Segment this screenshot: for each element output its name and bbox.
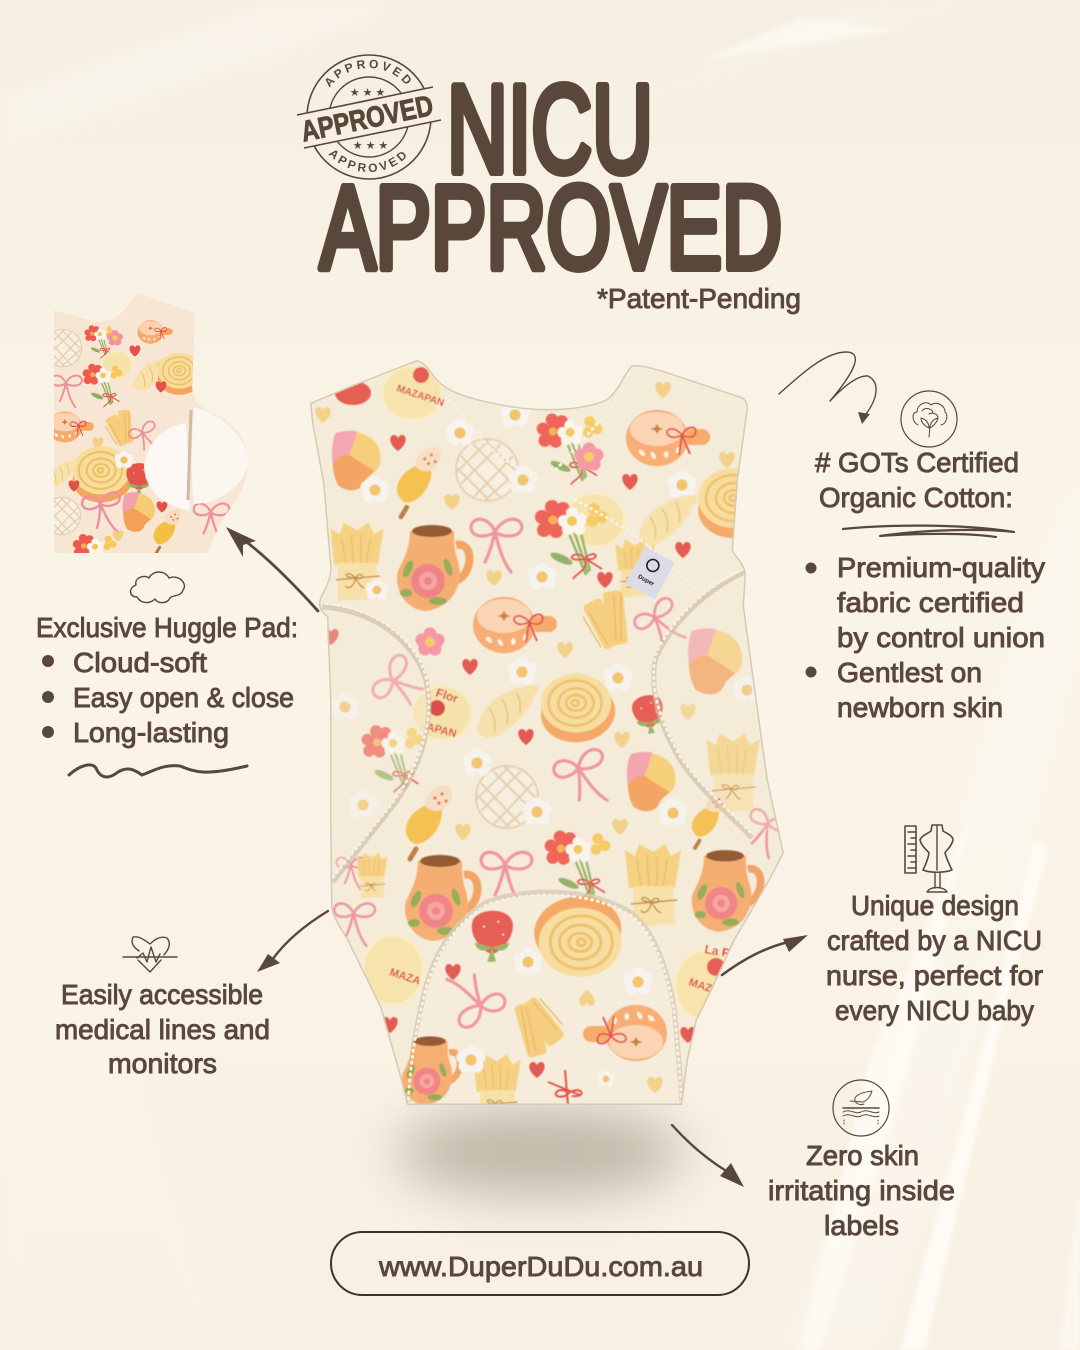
text block: huggle pad: Long-lasting (73, 717, 229, 748)
stamp: approved: APPROVED (328, 150, 406, 172)
patent pending note: *Patent-Pending (597, 283, 801, 314)
text block: medical lines: Easily accessible (61, 979, 263, 1010)
text block: huggle pad: Exclusive Huggle Pad: (36, 612, 298, 643)
stamp: approved: ★★★ (353, 139, 391, 152)
text block: zero skin irritation: labels (824, 1210, 899, 1241)
fabric motifs lower: MAZA (388, 966, 422, 988)
text block: cotton bullets: newborn skin (837, 692, 1003, 723)
fabric motifs lower: MAZA (687, 976, 721, 998)
scalloped seams (312, 368, 752, 1105)
text block: huggle pad: Cloud-soft (73, 647, 207, 678)
text block: unique design: Unique design (851, 890, 1019, 921)
icon: mannequin and ruler (905, 825, 953, 892)
stamp: approved: ★★★ (350, 86, 388, 99)
title: APPROVED (320, 162, 782, 294)
text block: cotton bullets: by control union (837, 622, 1045, 653)
text block: unique design: crafted by a NICU (827, 925, 1042, 956)
garment label tag (625, 546, 675, 600)
text block: medical lines (55, 979, 270, 1079)
crotch flap panel (456, 897, 641, 932)
title: NICU (447, 61, 653, 199)
text block: medical lines: monitors (108, 1048, 217, 1079)
arrow: to medical lines (257, 911, 328, 972)
title (320, 61, 782, 294)
website pill: www.DuperDuDu.com.au (378, 1251, 703, 1282)
text block: organic cotton (815, 447, 1019, 513)
text block: cotton bullets: Gentlest on (837, 657, 982, 688)
icon: cotton flower (901, 391, 957, 447)
arrow: squiggle to cotton (779, 352, 876, 424)
text block: zero skin irritation (768, 1140, 955, 1241)
text block: cotton bullets: Premium-quality (837, 552, 1045, 583)
text block: huggle pad: Easy open & close (73, 682, 294, 713)
fabric motifs upper: APAN (425, 721, 458, 740)
inset photo: huggle pad detail (54, 293, 248, 553)
text block: cotton bullets: fabric certified (837, 587, 1024, 618)
icon: cloud (130, 572, 184, 603)
stamp: approved: APPROVED (326, 60, 411, 88)
text block: organic cotton: Organic Cotton: (819, 482, 1013, 513)
huggle pad flaps (192, 407, 248, 504)
text block: organic cotton: # GOTs Certified (815, 447, 1019, 478)
text block: medical lines: medical lines and (55, 1014, 270, 1045)
text block: unique design (826, 890, 1043, 1026)
text block: cotton bullets (806, 552, 1045, 723)
text block: zero skin irritation: Zero skin (806, 1140, 919, 1171)
garment label tag: Duper (637, 574, 655, 588)
fabric motifs lower: La F (703, 942, 730, 960)
seam shadows (322, 572, 752, 882)
garment edge shading (310, 360, 784, 1105)
stamp: approved (296, 54, 442, 180)
fabric motifs upper (315, 366, 778, 812)
arrow: to huggle pad (226, 527, 318, 611)
arrow: to zero irritation (672, 1125, 744, 1187)
stamp: approved: APPROVED (298, 90, 436, 148)
arrow: to unique design (722, 935, 808, 975)
side wrap flaps (329, 628, 428, 868)
soft shadow under garment (395, 1108, 685, 1196)
text block: zero skin irritation: irritating inside (768, 1175, 955, 1206)
garment photo: bodysuit (300, 350, 800, 1124)
website pill (331, 1232, 749, 1295)
text block: unique design: every NICU baby (835, 995, 1034, 1026)
text block: huggle pad (36, 612, 298, 748)
icon: heart monitor (123, 937, 177, 972)
crotch flap motifs (402, 896, 668, 1104)
squiggle underline (69, 765, 247, 777)
fabric motifs upper: MAZAPAN (395, 383, 445, 409)
icon: feather on skin (833, 1080, 889, 1136)
fabric motifs upper: Flor (434, 686, 460, 706)
double underline scribble (843, 526, 1014, 537)
text block: unique design: nurse, perfect for (826, 960, 1043, 991)
fabric motifs lower (334, 747, 791, 1043)
